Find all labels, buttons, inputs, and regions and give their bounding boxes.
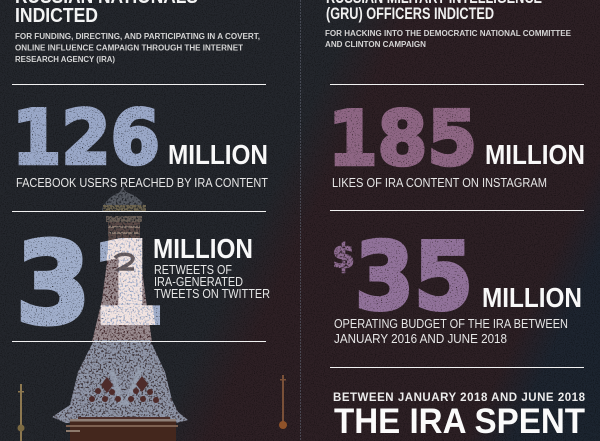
stat: 31 million [20,236,270,326]
tower spire stone [92,240,152,342]
left divider 1 [12,84,266,85]
description: LIKES OF IRA CONTENT ON INSTAGRAM [332,176,547,190]
description: IRA-GENERATED [154,275,243,289]
tower lower spire shadow [52,340,188,423]
stat: 126 million [12,94,268,190]
label million: MILLION [168,139,268,170]
description [154,263,270,301]
description: OPERATING BUDGET OF THE IRA BETWEEN [334,317,568,331]
description: RETWEETS OF [154,263,232,277]
tower neck [106,216,142,240]
left column subheading [15,32,260,64]
right divider 2 [330,210,584,211]
left divider 3 [12,341,266,342]
label million: MILLION [485,139,585,170]
left column heading [15,0,198,27]
spending kicker: BETWEEN JANUARY 2018 AND JUNE 2018 [333,392,586,404]
tower window glyph [115,254,134,269]
left column subheading: FOR FUNDING, DIRECTING, AND PARTICIPATING IN A COVERT, [15,32,260,41]
left column subheading: RESEARCH AGENCY (IRA) [15,55,115,64]
cathedral tower illustration [52,186,188,441]
label million: MILLION [153,233,253,264]
tower dome [102,186,146,212]
center vertical divider [300,0,302,441]
left column subheading: ONLINE INFLUENCE CAMPAIGN THROUGH THE INTERNET [15,44,243,52]
small cross left [18,384,24,441]
right divider 3 [330,367,584,368]
number 35: 35 [355,222,473,330]
tower lower spire stone [52,340,188,423]
description [334,317,568,346]
description: JANUARY 2016 AND JUNE 2018 [334,332,507,346]
number 31: 31 [16,220,165,350]
number 31 tower overlap: 31 [16,220,165,350]
right column heading: (GRU) OFFICERS INDICTED [326,5,494,23]
stat: 185 million [328,94,585,190]
label million: MILLION [482,282,582,313]
tower brown base [66,417,178,441]
small cross right [279,375,287,429]
right column subheading: FOR HACKING INTO THE DEMOCRATIC NATIONAL COMMITTEE [325,29,572,38]
dollar sign: $ [332,237,355,277]
description: TWEETS ON TWITTER [154,287,270,301]
number 185: 185 [328,94,477,182]
right column subheading: AND CLINTON CAMPAIGN [325,40,426,49]
stat: 35 million [332,222,582,346]
description: FACEBOOK USERS REACHED BY IRA CONTENT [16,176,268,190]
left column heading: INDICTED [15,5,98,27]
tower brick diamonds [89,376,159,403]
right column subheading [325,29,572,49]
right divider 1 [330,84,584,85]
number 126: 126 [12,94,160,182]
spending headline: THE IRA SPENT [334,402,585,441]
left divider 2 [12,211,266,212]
tower pale V ornament [112,368,140,405]
tower spire shadow [92,240,152,342]
